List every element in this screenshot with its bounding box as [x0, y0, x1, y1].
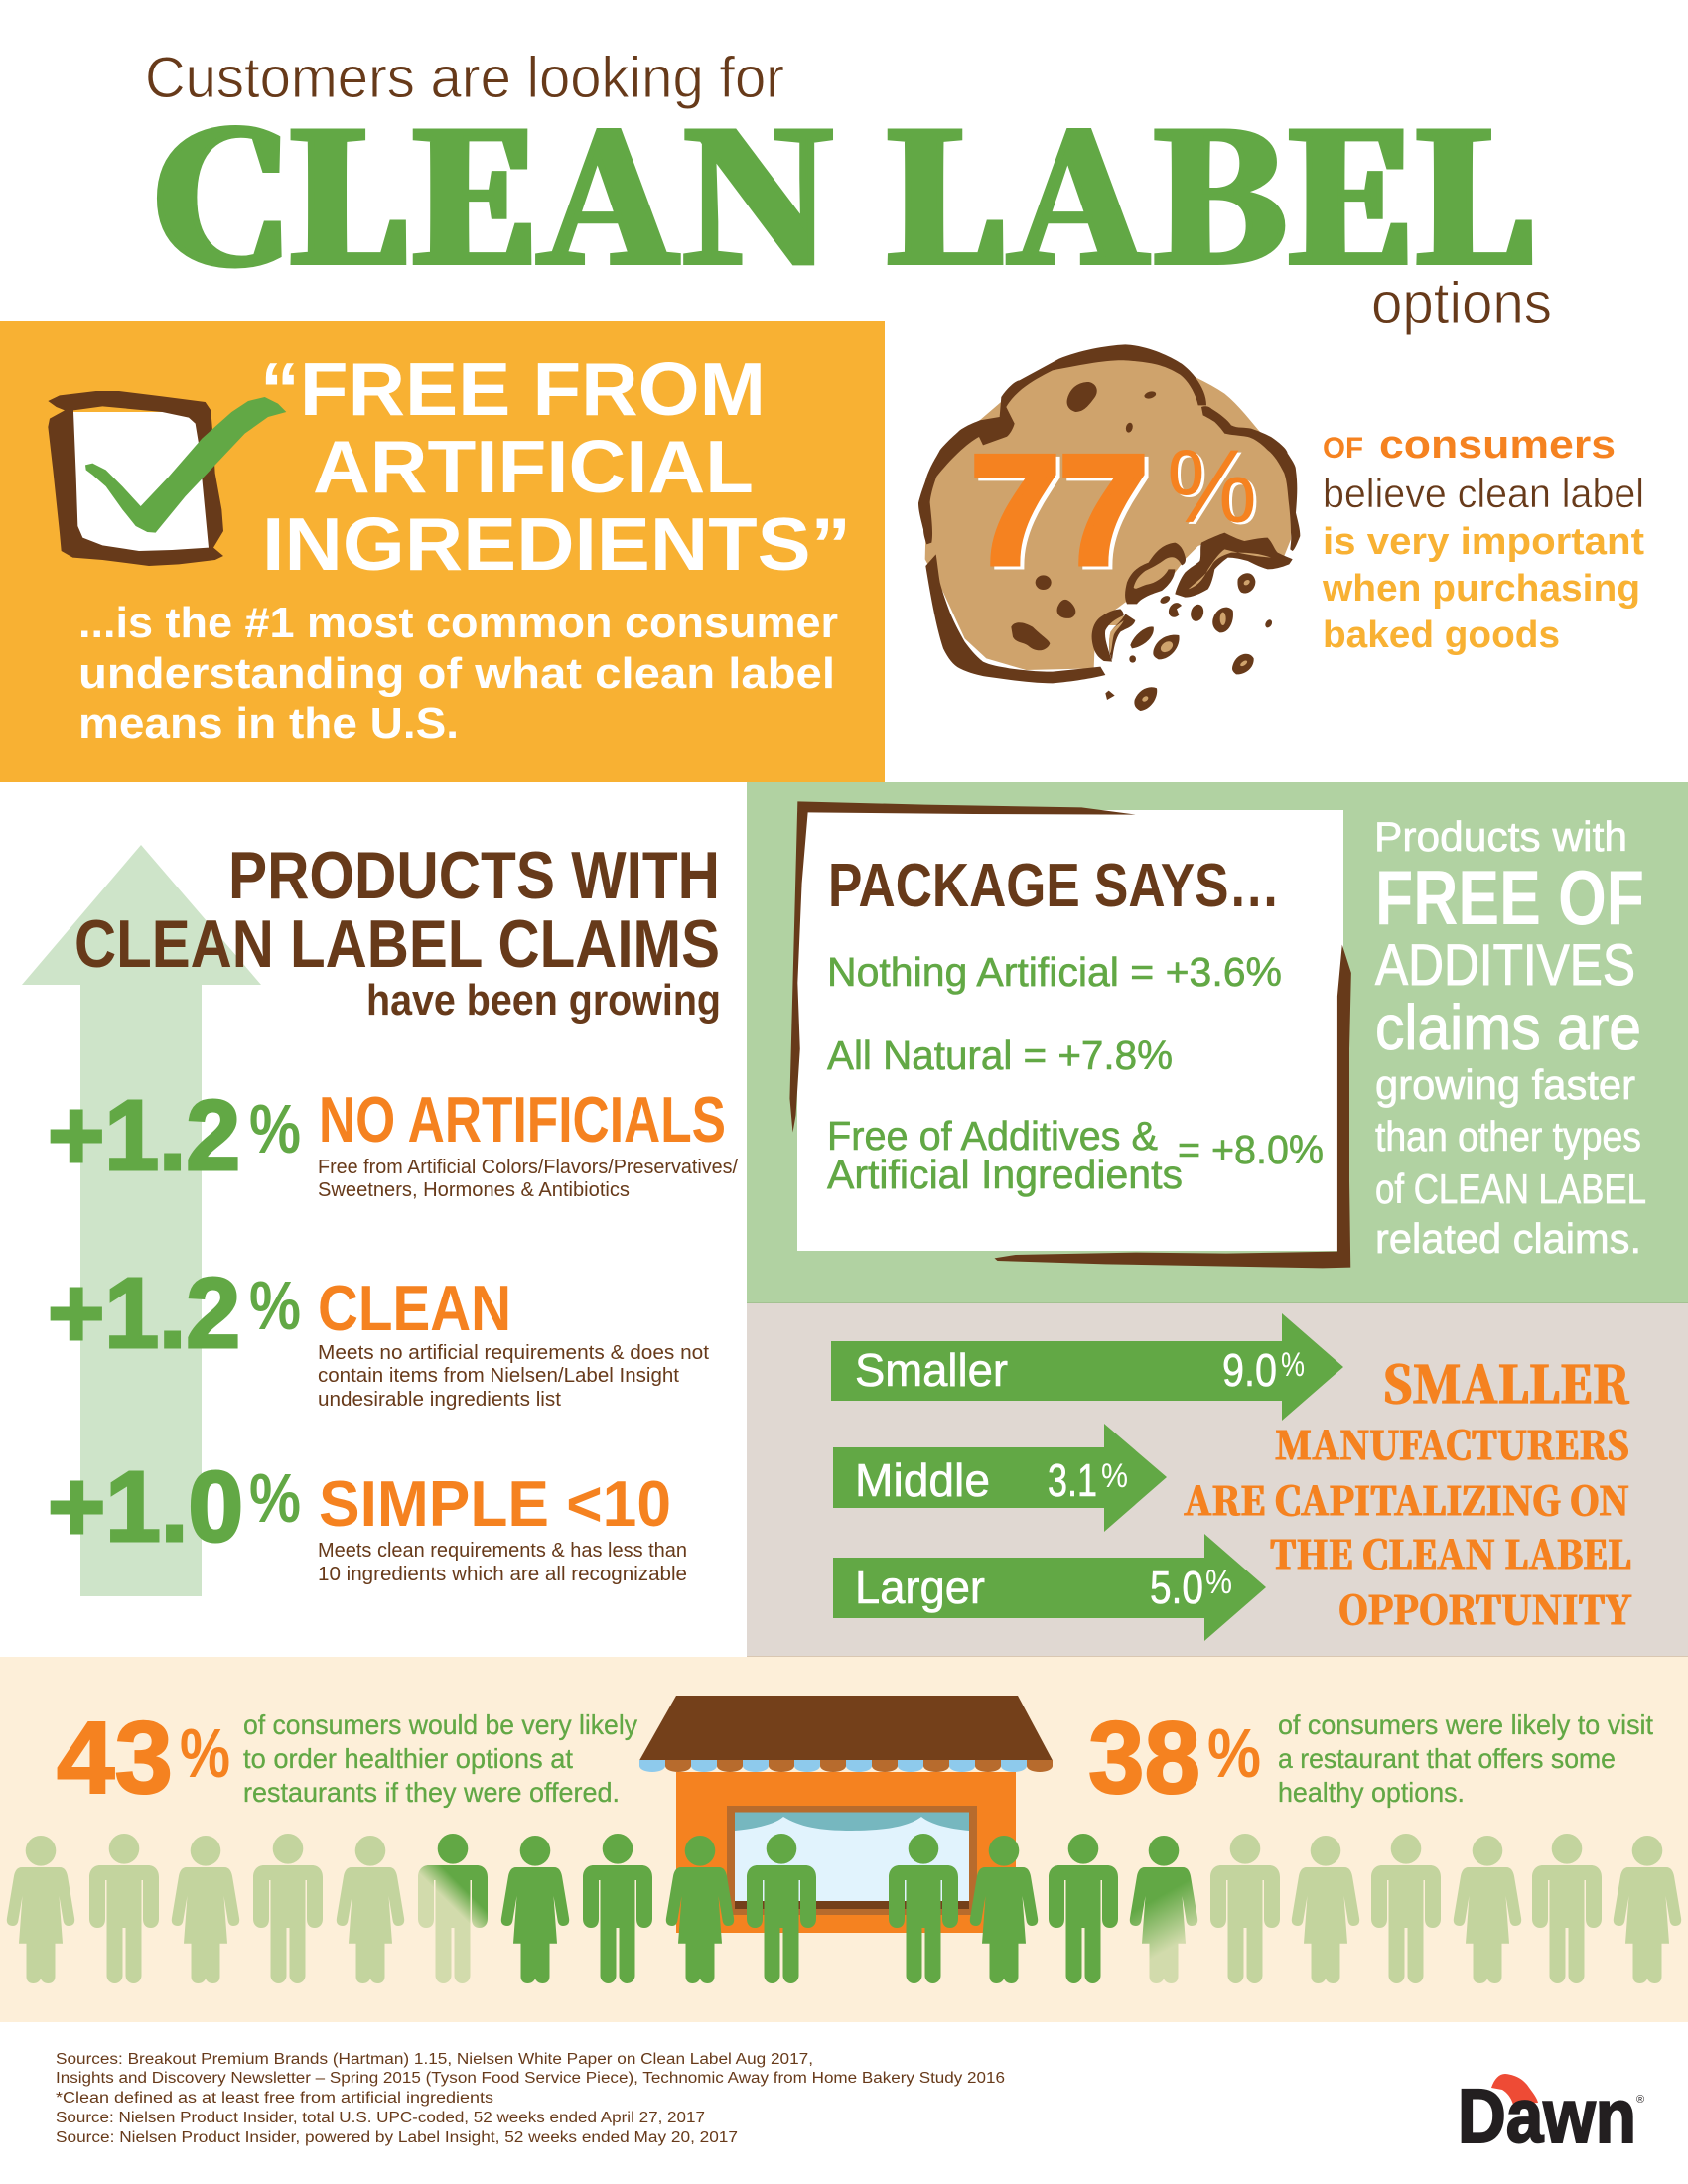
text: free of additives claims: claims are: [1375, 992, 1641, 1063]
heading: products with clean label claims: have been growing: [366, 976, 721, 1024]
stat: 43 percent: 43: [57, 1701, 173, 1815]
text: free of additives claims: growing faster: [1375, 1061, 1635, 1108]
stat: 38 percent: healthy options.: [1278, 1777, 1465, 1808]
text: free of additives claims: related claims.: [1375, 1215, 1641, 1262]
icon: bitten cookie with 77%: [918, 344, 1300, 711]
text: 77 percent of consumers: believe clean label: [1323, 471, 1644, 516]
stat: simple under 10: +1.0: [48, 1451, 243, 1563]
heading: products with clean label claims: [74, 838, 721, 1024]
people row: [7, 1834, 1681, 1983]
heading: free from artificial ingredients: [260, 347, 851, 586]
stat: 38 percent: of consumers were likely to visit: [1278, 1709, 1653, 1740]
arrow: larger 5.0%: %: [1205, 1564, 1232, 1601]
text: sources: *Clean defined as at least free from artificial ingredients: [56, 2090, 493, 2107]
text: most common understanding: understanding of what clean label: [78, 649, 835, 698]
stat: 38 percent: 38: [1088, 1701, 1200, 1815]
text: 77 percent of consumers: baked goods: [1323, 614, 1560, 656]
arrow: larger 5.0%: [833, 1534, 1266, 1641]
text: smaller manufacturers capitalizing: [1184, 1344, 1631, 1636]
number: 77 percent: 77: [975, 427, 1152, 599]
stat: 38 percent: [1088, 1701, 1653, 1815]
stat: no artificials: [48, 1080, 738, 1201]
text: 77 percent of consumers: consumers: [1379, 423, 1616, 467]
panel: free from artificial ingredients: [0, 321, 885, 782]
text: sources: [56, 2051, 1005, 2146]
stat: 43 percent: [57, 1701, 637, 1815]
title: customers are looking for: Customers are looking for: [145, 46, 784, 110]
panel: products with clean label claims: [22, 838, 738, 1596]
heading: package says: PACKAGE SAYS…: [828, 852, 1280, 920]
text: free of additives claims: ADDITIVES: [1375, 933, 1635, 998]
stat: no artificials: %: [249, 1090, 301, 1167]
text: 77 percent of consumers: OF: [1323, 432, 1363, 465]
stat: clean: +1.2: [48, 1258, 240, 1369]
text: 77 percent of consumers: is very important: [1323, 521, 1644, 563]
panel: smaller manufacturers: [747, 1303, 1688, 1658]
window: [727, 1806, 977, 1915]
number: 77 percent: [971, 424, 1260, 599]
arrow: middle 3.1%: [833, 1424, 1167, 1532]
stat: simple under 10: %: [249, 1459, 301, 1537]
chocolate chips: [1011, 382, 1273, 711]
list: claim growth rates: = +8.0%: [1178, 1127, 1324, 1172]
arrow: larger 5.0%: 5.0: [1150, 1562, 1203, 1613]
arrow: smaller 9.0%: [831, 1313, 1343, 1421]
stat: clean: Meets no artificial requirements & does not: [318, 1342, 709, 1364]
number: 77 percent: %: [1170, 431, 1260, 547]
arrow: smaller 9.0%: 9.0: [1222, 1344, 1277, 1396]
text: sources: Insights and Discovery Newsletter – Spring 2015 (Tyson Food Service Piece), Technomic Away from Home Bakery Study 2016: [56, 2070, 1005, 2087]
text: 77 percent of consumers: [1322, 423, 1644, 656]
stat: 43 percent: restaurants if they were offered.: [243, 1777, 620, 1808]
stat: no artificials: NO ARTIFICIALS: [319, 1083, 726, 1156]
stat: 43 percent: %: [180, 1714, 230, 1792]
list: claim growth rates: Artificial Ingredients: [827, 1152, 1183, 1197]
text: sources: Source: Nielsen Product Insider, total U.S. UPC-coded, 52 weeks ended April 27, 2017: [56, 2110, 705, 2126]
icon: checkbox with check mark: [48, 391, 286, 566]
arrow: middle 3.1%: Middle: [855, 1454, 990, 1506]
heading: products with clean label claims: CLEAN LABEL CLAIMS: [74, 906, 720, 982]
list: claim growth rates: All Natural = +7.8%: [827, 1032, 1173, 1078]
text: sources: Sources: Breakout Premium Brands (Hartman) 1.15, Nielsen White Paper on Clean Label Aug 2017,: [56, 2051, 813, 2068]
stat: no artificials: +1.2: [48, 1080, 240, 1191]
list: claim growth rates: Nothing Artificial = +3.6%: [827, 949, 1282, 995]
card: package says: [789, 801, 1351, 1268]
arrow: larger 5.0%: Larger: [855, 1562, 985, 1613]
stat: 43 percent: of consumers would be very likely: [243, 1709, 637, 1740]
stat: 38 percent: %: [1207, 1714, 1261, 1792]
text: free of additives claims: [1374, 813, 1646, 1262]
text: most common understanding: ...is the #1 most common consumer: [78, 599, 838, 647]
text: 77 percent of consumers: when purchasing: [1322, 568, 1640, 610]
title: clean label: CLEAN LABEL: [152, 62, 1535, 313]
text: smaller manufacturers capitalizing: MANUFACTURERS: [1275, 1416, 1629, 1471]
list: claim growth rates: [827, 949, 1324, 1197]
stat: clean: %: [249, 1267, 301, 1344]
stat: 43 percent: to order healthier options at: [243, 1743, 573, 1774]
logo: Dawn: Dawn: [1458, 2074, 1636, 2159]
stat: 38 percent: a restaurant that offers some: [1278, 1743, 1616, 1774]
text: free of additives claims: than other types: [1375, 1113, 1641, 1160]
stat: clean: CLEAN: [318, 1272, 511, 1344]
text: sources: Source: Nielsen Product Insider, powered by Label Insight, 52 weeks ended May 20, 2017: [56, 2129, 738, 2146]
stat: clean: [48, 1258, 709, 1411]
heading: free from artificial ingredients: “FREE FROM: [260, 347, 766, 431]
arrow: middle 3.1%: 3.1: [1048, 1454, 1097, 1506]
stat: no artificials: Sweetners, Hormones & Antibiotics: [318, 1179, 630, 1201]
stat: clean: contain items from Nielsen/Label Insight: [318, 1365, 679, 1387]
arrow: smaller 9.0%: Smaller: [855, 1344, 1008, 1396]
text: smaller manufacturers capitalizing: ARE CAPITALIZING ON: [1184, 1471, 1629, 1527]
stat: simple under 10: [48, 1451, 687, 1585]
arrow: growth: [22, 845, 261, 1596]
text: most common understanding: [78, 599, 838, 748]
text: smaller manufacturers capitalizing: OPPORTUNITY: [1338, 1580, 1631, 1636]
heading: free from artificial ingredients: INGREDIENTS”: [262, 502, 851, 586]
stat: simple under 10: 10 ingredients which are all recognizable: [318, 1564, 687, 1585]
heading: products with clean label claims: PRODUCTS WITH: [228, 838, 720, 913]
number: 77 percent: %: [1167, 429, 1257, 545]
icon: restaurant storefront: [639, 1696, 1053, 1933]
stat: clean: undesirable ingredients list: [318, 1389, 561, 1411]
stat: simple under 10: Meets clean requirements & has less than: [318, 1540, 687, 1562]
awning stripes: [639, 1760, 1053, 1772]
panel: restaurant statistics: [0, 1657, 1688, 2022]
text: free of additives claims: Products with: [1374, 813, 1627, 860]
logo: Dawn: ®: [1636, 2094, 1644, 2106]
list: claim growth rates: Free of Additives &: [827, 1113, 1158, 1159]
heading: free from artificial ingredients: ARTIFICIAL: [313, 425, 754, 508]
stat: simple under 10: SIMPLE <10: [319, 1467, 671, 1540]
panel: package says: [747, 782, 1688, 1304]
arrow: middle 3.1%: %: [1101, 1457, 1128, 1495]
stat: no artificials: Free from Artificial Colors/Flavors/Preservatives/: [318, 1157, 738, 1178]
title: options: options: [1371, 271, 1552, 336]
text: most common understanding: means in the U.S.: [78, 699, 459, 748]
number: 77 percent: 77: [971, 424, 1148, 596]
text: smaller manufacturers capitalizing: THE CLEAN LABEL: [1270, 1525, 1631, 1580]
arrow: smaller 9.0%: %: [1281, 1346, 1305, 1384]
text: smaller manufacturers capitalizing: SMALLER: [1383, 1344, 1629, 1418]
